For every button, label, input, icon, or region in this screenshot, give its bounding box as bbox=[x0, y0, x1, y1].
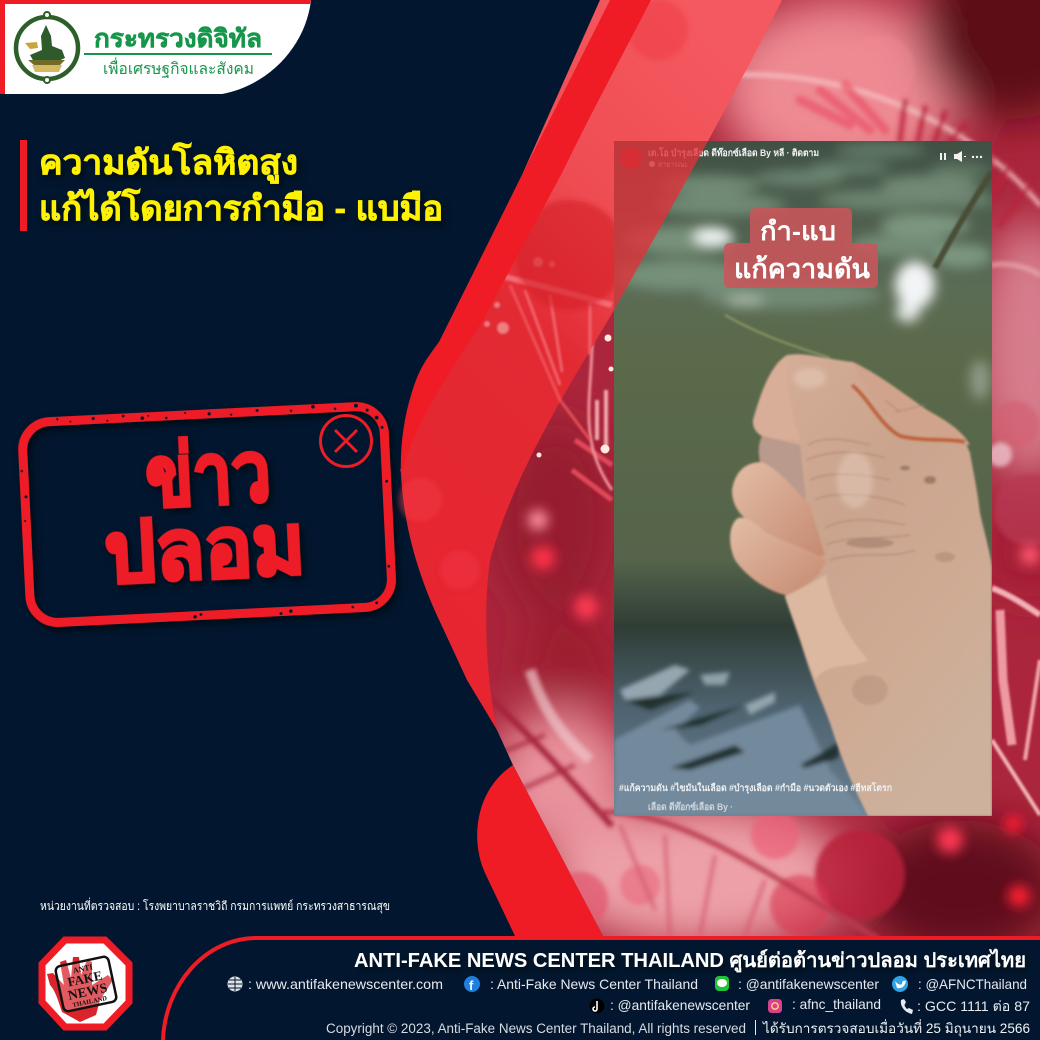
contact row one bbox=[248, 976, 1027, 992]
black stamp label: ANTI bbox=[72, 962, 94, 975]
swoosh tint over photo corner bbox=[614, 141, 708, 310]
footer title: ANTI-FAKE NEWS CENTER THAILAND ศูนย์ต่อต้านข่าวปลอม ประเทศไทย bbox=[354, 948, 1026, 974]
video caption bbox=[619, 782, 892, 813]
contact row one: : @AFNCThailand bbox=[918, 976, 1027, 992]
black stamp label: NEWS bbox=[67, 980, 109, 1003]
source note: หน่วยงานที่ตรวจสอบ : โรงพยาบาลราชวิถี กรมการแพทย์ กระทรวงสาธารณสุข bbox=[40, 897, 390, 914]
label: squeeze and release: กำ-แบ bbox=[760, 216, 836, 246]
white header shape bbox=[0, 0, 311, 94]
solid red band bbox=[401, 0, 651, 475]
video header text bbox=[620, 147, 819, 169]
black stamp label: THAILAND bbox=[72, 995, 108, 1009]
icon: phone bbox=[901, 999, 913, 1014]
copyright line bbox=[326, 1019, 1030, 1037]
avatar bbox=[620, 147, 642, 169]
red blob bbox=[477, 765, 603, 936]
ministry emblem bbox=[16, 12, 78, 83]
rope line bbox=[725, 315, 830, 358]
contact row one: : @antifakenewscenter bbox=[738, 976, 879, 992]
black stamp label: FAKE bbox=[66, 968, 104, 990]
red hand bbox=[47, 957, 113, 1022]
water background bbox=[614, 141, 992, 816]
branch bbox=[935, 172, 992, 268]
video screenshot panel bbox=[614, 141, 995, 816]
thumb shadow crease bbox=[852, 385, 965, 442]
river reflections bbox=[614, 665, 868, 816]
icon: twitter bbox=[892, 976, 908, 992]
ring finger bbox=[732, 462, 825, 556]
DNA strand lower left bbox=[570, 342, 614, 502]
red header border bbox=[0, 0, 311, 94]
video controls bbox=[940, 151, 982, 162]
white sparkle dots bbox=[536, 334, 614, 458]
highlight bbox=[794, 368, 873, 508]
fake news stamp: ปลอม bbox=[103, 496, 307, 600]
video caption: เลือด ดีท๊อกซ์เลือด By · bbox=[648, 801, 733, 813]
copyright line: Copyright © 2023, Anti-Fake News Center Thailand, All rights reserved bbox=[326, 1021, 746, 1036]
headline accent bar bbox=[20, 140, 27, 231]
footer navy background bbox=[0, 936, 1040, 1040]
contact row two: : @antifakenewscenter bbox=[610, 997, 750, 1013]
DNA strand bottom bbox=[492, 670, 880, 940]
stamp wear marks bbox=[18, 401, 394, 627]
lily pads bbox=[615, 143, 995, 309]
footer red arc bbox=[163, 938, 1040, 1040]
headline bbox=[39, 142, 443, 228]
thumb bbox=[936, 416, 971, 446]
icon: tiktok bbox=[590, 998, 604, 1014]
label: squeeze and release: แก้ความดัน bbox=[734, 254, 871, 284]
icon: facebook: f bbox=[469, 978, 474, 993]
stamp frame bbox=[21, 405, 393, 624]
headline: แก้ได้โดยการกำมือ - แบมือ bbox=[39, 188, 443, 228]
water glare bbox=[692, 228, 990, 400]
video header text: เด.โอ บำรุงเลือด ดีท๊อกซ์เลือด By หลี · ติดตาม bbox=[648, 147, 819, 159]
knuckle creases bbox=[806, 400, 925, 560]
palm heel bbox=[785, 575, 868, 680]
fake news stamp bbox=[18, 401, 394, 627]
background image: blood cells and DNA bbox=[400, 0, 1040, 960]
video caption: #แก้ความดัน #ไขมันในเลือด #บำรุงเลือด #กำมือ #นวดตัวเอง #ฮีทสโตรก bbox=[619, 782, 892, 794]
copyright line: ได้รับการตรวจสอบเมื่อวันที่ 25 มิถุนายน 2566 bbox=[762, 1019, 1030, 1037]
blood cells bbox=[552, 35, 1040, 935]
header logo panel bbox=[0, 0, 311, 94]
label: squeeze and release bbox=[724, 208, 878, 288]
icon: instagram bbox=[768, 999, 782, 1013]
headline: ความดันโลหิตสูง bbox=[39, 142, 298, 184]
contact row two bbox=[610, 996, 1030, 1014]
stamp x icon bbox=[320, 416, 372, 466]
little finger bbox=[730, 518, 826, 595]
index finger bbox=[752, 354, 788, 439]
fist bbox=[730, 354, 992, 816]
glowing dots bbox=[528, 510, 1040, 907]
contact row one: : Anti-Fake News Center Thailand bbox=[490, 976, 698, 992]
contact row two: : GCC 1111 ต่อ 87 bbox=[917, 998, 1030, 1014]
label background bbox=[724, 208, 878, 288]
DNA strand right bbox=[992, 588, 1040, 815]
contact row two: : afnc_thailand bbox=[792, 996, 881, 1012]
DNA over swoosh bbox=[484, 257, 612, 440]
hand and wrist bbox=[767, 354, 992, 816]
video header text: สาธารณะ bbox=[658, 160, 688, 169]
sun spots bbox=[846, 466, 955, 705]
octagon sign bbox=[42, 940, 129, 1027]
anti fake news badge bbox=[42, 940, 129, 1027]
ministry tagline: เพื่อเศรษฐกิจและสังคม bbox=[103, 57, 254, 78]
icon: facebook bbox=[464, 976, 480, 993]
contact row one: : www.antifakenewscenter.com bbox=[248, 976, 443, 992]
red swoosh bbox=[401, 0, 782, 730]
swoosh cells bbox=[398, 0, 688, 590]
ministry name: กระทรวงดิจิทัล bbox=[94, 25, 262, 53]
DNA strand top right bbox=[735, 75, 1040, 275]
black stamp label bbox=[55, 956, 117, 1012]
footer panel bbox=[0, 936, 1040, 1040]
icon: line bbox=[715, 976, 729, 991]
middle finger bbox=[759, 436, 806, 501]
icon: website globe bbox=[228, 976, 242, 992]
stamp text: ข่าว bbox=[143, 424, 273, 524]
